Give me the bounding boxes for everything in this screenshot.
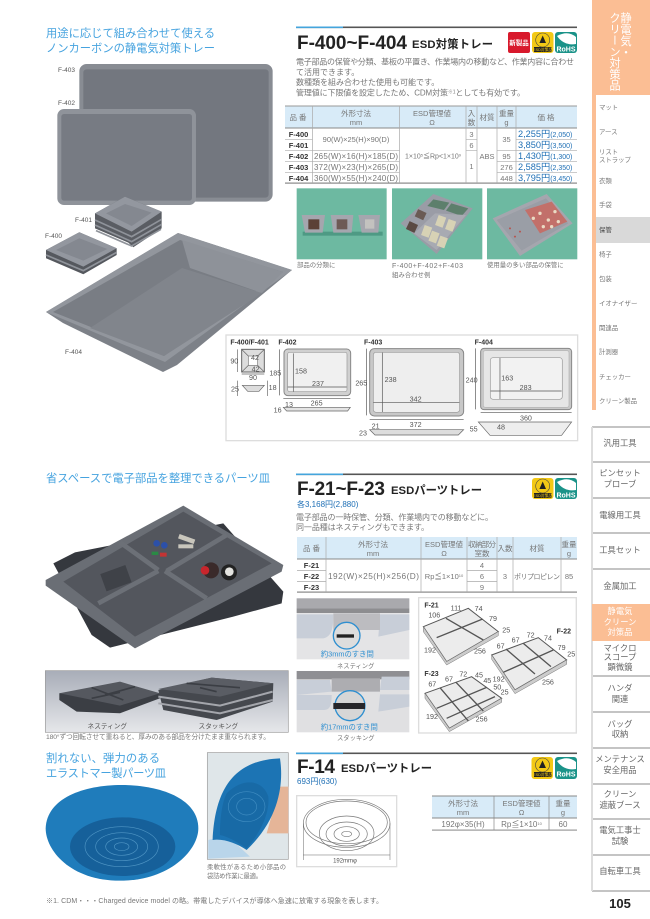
description text: 同一品種はネスティングもできます。	[296, 522, 429, 532]
drawing: F-22: 79	[558, 644, 566, 652]
drawing: F-400/F-401	[230, 349, 277, 396]
badge: ESD: ESD対策品	[533, 493, 552, 498]
spec table: F-21 series: g	[567, 549, 571, 558]
badge: RoHS: RoHS	[556, 492, 576, 500]
spec table: F-21 series: 10	[459, 573, 464, 578]
spec table: F-21 series: Rp≦1×10	[425, 572, 459, 581]
sidebar: category tabs: クリーン	[604, 617, 636, 627]
spec table: F-14: 重量	[556, 799, 571, 808]
section header: F-14: F-14	[297, 757, 335, 778]
sidebar: subcategory list: イオナイザー	[599, 300, 637, 308]
description text	[296, 56, 574, 98]
spec table: F-21 series: F-23	[304, 583, 319, 592]
spec table: F-400 series: 9	[459, 152, 462, 158]
drawing: F-403	[355, 349, 464, 437]
spec table: F-400 series: 276	[500, 163, 513, 172]
section header: F-400~F-404: ESD対策トレー	[412, 37, 493, 51]
product labels: F-400	[45, 233, 62, 240]
drawing: F-403: 238	[385, 376, 397, 384]
badge: new product: 新製品	[509, 38, 529, 47]
drawing: F-403: 21	[372, 423, 380, 431]
drawing: F-23: 45	[475, 672, 483, 680]
badge: ESD	[532, 757, 553, 779]
sidebar: subcategory list: 保管	[599, 225, 612, 234]
description text: としても有効です。	[455, 88, 525, 98]
spec table: F-400 series: 95	[502, 152, 511, 161]
photo captions: 使用量の多い部品の保管に	[487, 260, 564, 269]
spec table: F-400 series: 90(W)×25(H)×90(D)	[323, 135, 390, 144]
section header: F-14: ESDパーツトレー	[341, 762, 432, 775]
spec table: F-14: 10	[537, 821, 543, 826]
sidebar: category tabs: 収納	[612, 729, 628, 739]
spec table: F-400 series: 3,795円(3,450)	[518, 173, 572, 183]
panel: dimension drawings F-400 series: F-402	[278, 340, 297, 347]
heading: elastomer parts tray	[46, 752, 166, 780]
sidebar: category tabs: 関連	[612, 694, 628, 704]
spec table: F-400 series: 材質	[480, 112, 495, 122]
photo captions	[297, 260, 564, 279]
spec table: F-400 series: 2,255円(2,050)	[518, 129, 572, 139]
sidebar: subcategory list: リスト	[599, 148, 618, 156]
product photo: blue elastomer bowl	[46, 785, 198, 881]
parts	[100, 534, 237, 591]
caption: flexible bowl: 柔軟性があるため小部品の	[207, 862, 286, 871]
panel: dimension drawings F-400 series	[226, 335, 578, 441]
section header: F-21~F-23: F-21~F-23	[297, 479, 385, 500]
section header: F-21~F-23	[296, 474, 577, 509]
drawing: F-403: 23	[359, 429, 367, 437]
spec table: F-400 series: F-404	[289, 174, 309, 183]
photo: nesting and stacking: スタッキング	[198, 721, 239, 730]
sidebar: top category tab: クリーン対策品	[608, 12, 621, 91]
section header: F-14: 693円(630)	[297, 777, 337, 786]
section header: F-400~F-404	[296, 26, 577, 54]
badge: ESD	[532, 32, 554, 53]
spec table: F-400 series: 1	[469, 162, 474, 171]
drawing: F-23: 192	[426, 713, 438, 721]
drawing: F-400/F-401: 42	[252, 365, 260, 373]
drawing: F-21: 111	[451, 604, 462, 612]
drawing: F-402: 13	[285, 401, 293, 409]
tray F-403	[79, 64, 273, 202]
drawing: F-400/F-401: 90	[230, 357, 238, 365]
panel: dimension drawings F-400 series: F-403	[364, 340, 382, 347]
sidebar: category tabs: 汎用工具	[603, 438, 637, 448]
photo: nesting gap	[297, 598, 409, 659]
spec table: F-21 series: 85	[565, 572, 573, 581]
drawing: F-403: 372	[410, 421, 422, 429]
drawing: F-23: 25	[501, 688, 509, 696]
panel: F-14 dimension drawing	[297, 796, 397, 867]
sidebar: category tabs: 顕微鏡	[608, 662, 633, 672]
sidebar: category tabs: 試験	[612, 836, 629, 846]
photo captions: 部品の分類に	[297, 260, 335, 269]
description text: 電子部品の保管や分類、基板の平置き、作業場内の移動など、作業内容に合わせ	[296, 56, 574, 66]
spec table: F-400 series: 448	[500, 174, 513, 183]
drawing: F-404: 55	[470, 425, 478, 433]
heading: non-carbon antistatic tray: 用途に応じて組み合わせて使える	[46, 26, 215, 40]
drawing: F-23: 45	[483, 677, 491, 685]
drawing: F-23: 67	[445, 676, 453, 684]
spec table: F-21 series: 品 番	[303, 543, 321, 553]
spec table: F-400 series: 360(W)×55(H)×240(D)	[314, 174, 398, 183]
spec table: F-400 series: 265(W)×16(H)×185(D)	[314, 152, 398, 161]
drawing: F-400/F-401: 18	[269, 384, 277, 392]
sidebar: subcategory list	[596, 104, 650, 405]
spec table: F-400 series: 数	[468, 117, 476, 127]
drawing: F-400/F-401: 42	[251, 354, 259, 362]
sidebar: category tabs: 対策品	[608, 627, 632, 637]
drawing: F-403: 265	[355, 379, 367, 387]
spec table: F-21 series: 重量	[562, 540, 577, 549]
sidebar: category tabs: 安全用品	[603, 765, 637, 775]
drawing: F-402: 16	[274, 406, 282, 414]
spec table: F-21 series: ESD管理値	[425, 539, 463, 549]
sidebar: subcategory list: ストラップ	[599, 156, 632, 164]
sidebar: top category tab: 静電気・	[619, 11, 632, 58]
heading: parts tray: 省スペースで電子部品を整理できるパーツ皿	[46, 471, 270, 485]
sidebar: category tabs: バッグ	[608, 719, 632, 729]
spec table: F-21 series: 9	[480, 583, 484, 592]
spec table: F-400 series: 3,850円(3,500)	[518, 140, 572, 150]
section header: F-400~F-404: F-400~F-404	[297, 33, 407, 54]
drawing: F-22: 67	[512, 636, 520, 644]
photo caption: nesting: 180°ずつ回転させて重ねると、厚みのある部品を分けたまま重なられます。	[46, 732, 270, 741]
spec table: F-21 series: ポリプロピレン	[514, 573, 560, 581]
compartments	[98, 535, 227, 603]
spec table: F-14: 192φ×35(H)	[441, 820, 485, 829]
sidebar: category tabs: メンテナンス	[595, 754, 645, 764]
nesting trays	[59, 682, 160, 713]
spec table: F-400 series: mm	[350, 118, 362, 127]
drawing: F-21: 192	[424, 646, 436, 654]
drawing: F-402: 265	[311, 399, 323, 407]
drawing: F-23: 67	[428, 681, 436, 689]
page number: 105	[609, 896, 631, 911]
panel: isometric dimensions F-21 to F-23: F-23	[424, 671, 439, 678]
spec table: F-400 series	[285, 106, 577, 184]
spec table: F-14: mm	[457, 808, 469, 817]
spec table: F-400 series: ABS	[479, 152, 495, 161]
spec table: F-14: 外形寸法	[448, 798, 478, 808]
product labels: F-403	[58, 67, 75, 74]
sidebar: subcategory list: クリーン製品	[599, 396, 637, 405]
badge: RoHS	[555, 32, 577, 54]
drawing: F-22: 192	[493, 676, 505, 684]
spec table: F-21 series: mm	[367, 549, 379, 558]
sidebar: subcategory list: 手袋	[599, 200, 612, 209]
sidebar: subcategory list: 包装	[599, 274, 612, 283]
tray F-404	[46, 233, 292, 372]
panel: isometric dimensions F-21 to F-23	[419, 598, 576, 733]
drawing: F-22: 25	[567, 651, 575, 659]
drawing: F-21	[423, 604, 510, 665]
photo: nesting and stacking	[45, 671, 288, 732]
drawing: F-404: 283	[520, 384, 532, 392]
sidebar: subcategory list: マット	[599, 104, 618, 112]
drawing: F-402	[269, 349, 351, 414]
drawing: F-404	[466, 348, 572, 435]
description text: 管理値に下限値を設定したため、CDM対策	[296, 88, 448, 98]
photo: nesting gap: 約3mmのすき間	[321, 650, 374, 659]
spec table: F-21 series: 外形寸法	[358, 539, 388, 549]
spec table: F-14: 60	[559, 820, 568, 829]
sidebar: top category tab	[592, 0, 650, 410]
sidebar: subcategory list: 計測器	[599, 347, 619, 356]
badge: RoHS	[555, 757, 577, 779]
spec table: F-400 series: 1×10	[405, 154, 421, 160]
panel: isometric dimensions F-21 to F-23: F-21	[424, 602, 439, 609]
drawing: F-404: 240	[466, 377, 478, 385]
sidebar: subcategory list: アース	[599, 128, 617, 136]
upper tray	[46, 506, 283, 648]
photo: combination example	[392, 188, 482, 259]
photo captions: F-400+F-402+F-403	[392, 263, 463, 270]
heading: elastomer parts tray: エラストマー製パーツ皿	[46, 766, 166, 780]
spec table: F-400 series: F-402	[289, 152, 308, 161]
badge: ESD: ESD対策品	[533, 47, 552, 52]
product photo: F-21 parts trays	[46, 506, 283, 648]
spec table: F-21 series: 収納部分	[468, 539, 496, 549]
spec table: F-21 series: F-22	[304, 572, 319, 581]
spec table: F-400 series: 重量	[499, 109, 514, 118]
spec table: F-400 series: 1,430円(1,300)	[518, 151, 572, 161]
spec table: F-400 series: 価 格	[537, 112, 555, 122]
drawing: F-402: 237	[312, 380, 324, 388]
photo: parts sorting	[297, 188, 387, 259]
spec table: F-400 series: 35	[502, 135, 511, 144]
drawing: F-21: 256	[474, 647, 486, 655]
panel: F-14 dimension drawing: 192mmφ	[333, 858, 357, 864]
product labels: F-402	[58, 100, 75, 107]
description text: 数種類を組み合わせた使用も可能です。	[296, 77, 439, 87]
spec table: F-14: ESD管理値	[503, 798, 541, 808]
spec table: F-21 series: 入数	[498, 543, 513, 553]
photo: bulk parts storage	[487, 188, 577, 259]
photo: stacking gap	[297, 671, 409, 732]
badge: new product	[508, 32, 530, 53]
description text: ※1	[448, 90, 456, 96]
badge: ESD	[532, 478, 554, 499]
sidebar: subcategory list: チェッカー	[599, 373, 631, 381]
sidebar: category tabs: 電気工事士	[599, 825, 641, 835]
drawing: F-23: 72	[459, 671, 467, 679]
tray F-402	[57, 109, 196, 205]
spec table: F-400 series: 5	[421, 152, 424, 158]
spec table: F-400 series: g	[504, 118, 509, 127]
sidebar: category tabs: 静電気	[608, 606, 632, 616]
drawing: F-400/F-401: 90	[249, 374, 257, 382]
description text	[296, 512, 493, 532]
drawing: F-21: 25	[502, 626, 510, 634]
product labels	[45, 67, 92, 356]
spec table: F-21 series: 192(W)×25(H)×256(D)	[328, 571, 419, 581]
lower tray	[53, 523, 283, 648]
spec table: F-400 series: F-400	[289, 130, 308, 139]
spec table: F-21 series: 4	[480, 561, 484, 570]
spec table: F-14: Rp≦1×10	[501, 820, 537, 829]
caption: nesting: ネスティング	[337, 661, 375, 670]
panel: dimension drawings F-400 series: F-400/F-401	[230, 340, 269, 347]
spec table: F-400 series: 372(W)×23(H)×265(D)	[314, 163, 398, 172]
heading: non-carbon antistatic tray: ノンカーボンの静電気対策トレー	[46, 41, 215, 55]
sidebar: category tabs: 電線用工具	[599, 510, 641, 520]
section header: F-21~F-23: ESDパーツトレー	[391, 484, 482, 497]
drawing: F-404: 163	[501, 375, 513, 383]
spec table: F-400 series: F-403	[289, 163, 308, 172]
sidebar: category tabs: マイクロ	[603, 643, 637, 653]
drawing: F-22	[492, 632, 575, 694]
spec table: F-400 series: 2,585円(2,350)	[518, 162, 572, 172]
drawing: F-22: 72	[527, 632, 535, 640]
badge: RoHS: RoHS	[556, 772, 576, 778]
spec table: F-21 series: Ω	[441, 549, 447, 558]
tray stack F-400	[46, 232, 117, 274]
sidebar: subcategory list: 衣類	[599, 176, 612, 185]
heading: non-carbon antistatic tray	[46, 26, 215, 55]
spec table: F-14	[432, 796, 577, 831]
drawing: F-402: 158	[295, 367, 307, 375]
drawing: F-402: 185	[269, 369, 281, 377]
stacking trays	[158, 678, 273, 720]
spec table: F-14: g	[561, 808, 565, 817]
drawing: F-22: 67	[497, 642, 505, 650]
spec table: F-400 series: 6	[469, 141, 474, 150]
panel: dimension drawings F-400 series: F-404	[475, 340, 493, 347]
section header: F-21~F-23: 各3,168円(2,880)	[297, 499, 359, 509]
photo captions: 組み合わせ例	[392, 270, 430, 279]
spec table: F-400 series: ≦Rp<1×10	[423, 152, 459, 160]
spec table: F-400 series: 3	[469, 130, 474, 139]
drawing: F-23	[425, 671, 509, 732]
spec table: F-14: Ω	[519, 808, 525, 817]
panel: isometric dimensions F-21 to F-23: F-22	[557, 628, 571, 635]
product labels: F-401	[75, 217, 92, 224]
spec table: F-400 series: ESD管理値	[413, 108, 451, 118]
badge: ESD: ESD対策品	[533, 772, 552, 777]
drawing: F-22: 256	[542, 678, 554, 686]
sidebar: category tabs: スコープ	[604, 652, 637, 662]
badge: RoHS: RoHS	[556, 46, 576, 54]
sidebar: subcategory list: 関連品	[599, 323, 618, 332]
spec table: F-21 series: 3	[503, 572, 507, 581]
sidebar: category tabs: クリーン	[604, 789, 636, 799]
sidebar: category tabs: 自転車工具	[599, 866, 641, 876]
spec table: F-21 series: 材質	[530, 543, 545, 553]
spec table: F-21 series	[297, 537, 577, 593]
description text: 電子部品の一時保管、分類、作業場内での移動などに。	[296, 512, 493, 522]
photo: stacking gap: 約17mmのすき間	[321, 723, 378, 732]
drawing: F-404: 360	[520, 414, 532, 422]
caption: flexible bowl: 袋詰め作業に最適。	[207, 871, 262, 880]
sidebar: category tabs: 遮蔽ブース	[599, 800, 641, 810]
sidebar: category tabs: 金属加工	[603, 581, 637, 591]
footnote: ※1. CDM・・・Charged device model の略。帯電したデバイスが導体へ急速に放電する現象を表します。	[46, 896, 383, 905]
photo: flexible bowl in hand	[207, 753, 288, 859]
drawing: F-404: 48	[497, 423, 505, 431]
spec table: F-400 series: 品 番	[289, 112, 307, 122]
section header: F-14	[296, 752, 577, 786]
drawing: F-403: 342	[410, 396, 422, 404]
drawing: F-400/F-401: 25	[231, 385, 239, 393]
spec table: F-21 series: 6	[480, 572, 484, 581]
sidebar: category tabs: ピンセット	[599, 468, 641, 478]
description text: て活用できます。	[296, 67, 359, 77]
sidebar: category tabs: ハンダ	[608, 683, 632, 693]
caption: flexible bowl	[207, 862, 286, 880]
sidebar: subcategory list: 椅子	[599, 250, 612, 258]
spec table: F-400 series: 外形寸法	[341, 108, 371, 118]
heading: elastomer parts tray: 割れない、弾力のある	[46, 752, 160, 765]
tray stack F-401	[95, 197, 162, 247]
caption: stacking: スタッキング	[337, 733, 375, 742]
sidebar: category tabs: プローブ	[604, 479, 637, 489]
spec table: F-400 series: Ω	[429, 118, 435, 127]
drawing: F-23: 256	[476, 716, 488, 724]
drawing: F-21: 74	[475, 605, 483, 613]
product photo: F-400 to F-404 trays	[46, 64, 292, 372]
badge: RoHS	[555, 478, 577, 500]
sidebar: category tabs: 工具セット	[599, 545, 641, 555]
drawing: F-21: 106	[428, 612, 440, 620]
sidebar: category tabs	[591, 427, 650, 891]
drawing: F-22: 74	[544, 634, 552, 642]
product labels: F-404	[65, 349, 82, 356]
spec table: F-400 series: F-401	[289, 141, 308, 150]
spec table: F-21 series: 室数	[474, 548, 490, 558]
drawing: F-23: 50	[493, 683, 501, 691]
photo: nesting and stacking: ネスティング	[88, 721, 127, 730]
drawing: F-21: 79	[489, 615, 497, 623]
spec table: F-400 series: 入	[468, 109, 476, 118]
spec table: F-21 series: F-21	[304, 561, 319, 570]
